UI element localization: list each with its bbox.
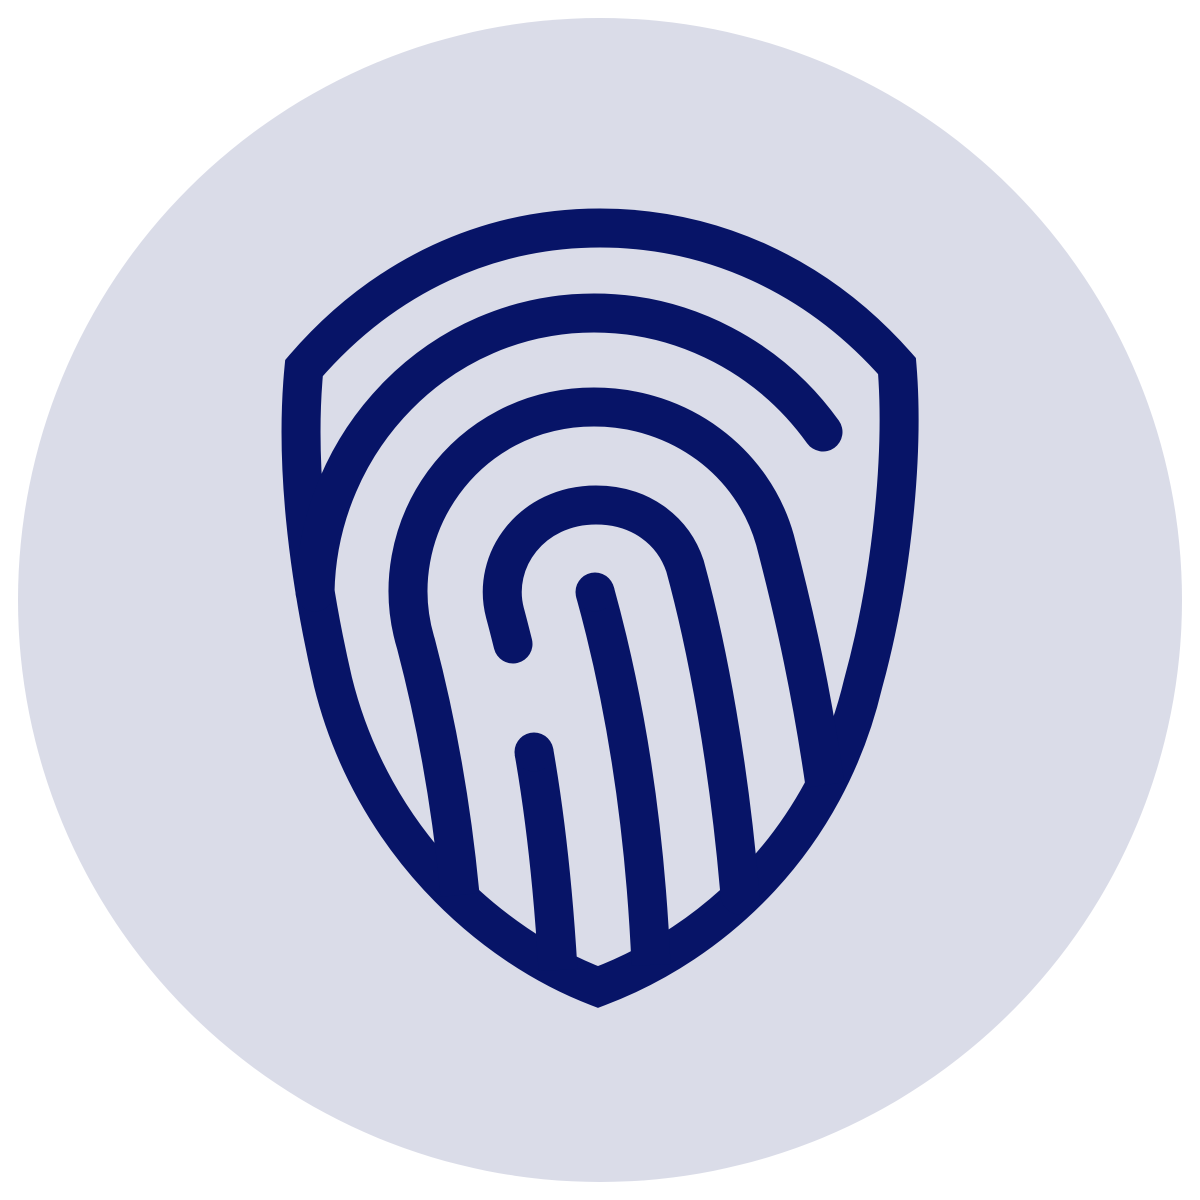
shield outline (301, 228, 899, 987)
icon: fingerprint shield (301, 228, 899, 987)
outer ridge (315, 313, 823, 592)
third ridge (502, 505, 740, 895)
short ridge (534, 752, 558, 970)
second ridge (408, 407, 825, 895)
center ridge (595, 592, 651, 965)
